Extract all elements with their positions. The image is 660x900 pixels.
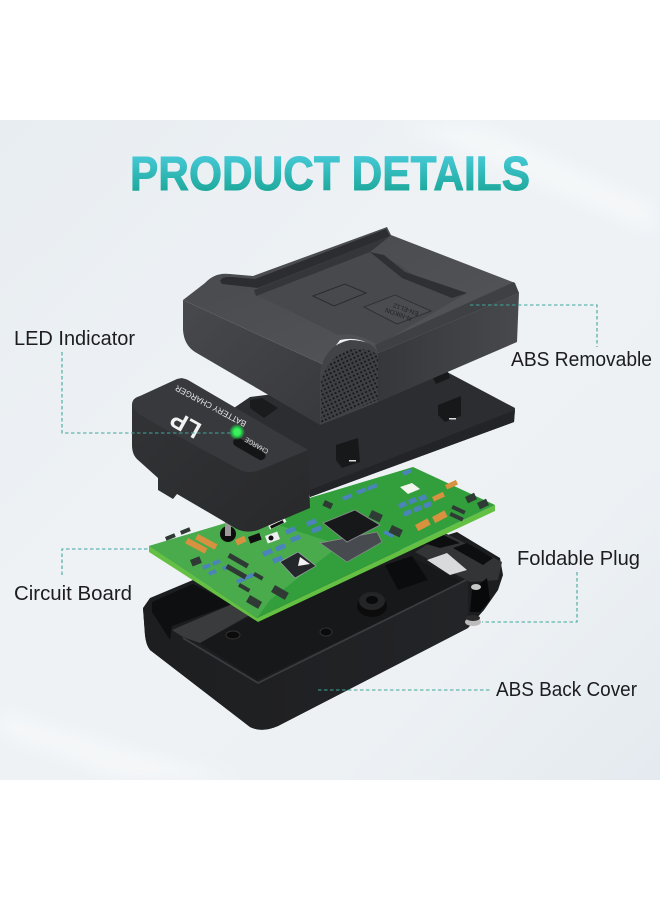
plate lower edge	[310, 410, 515, 497]
circuit board	[149, 467, 495, 622]
board lit area	[149, 516, 340, 618]
cover boss	[357, 592, 387, 617]
callout: ABS Removable	[470, 305, 652, 371]
led indicator	[229, 424, 245, 440]
brand text: BATTERY CHARGER	[173, 383, 248, 429]
adapter contact window	[313, 284, 366, 306]
cover interior floor	[200, 558, 463, 680]
cover outer body	[143, 532, 503, 730]
adapter right rail	[375, 282, 519, 353]
adapter recess wall	[254, 236, 390, 296]
leader line	[318, 689, 490, 691]
plate body	[228, 372, 515, 497]
cover grey step	[172, 592, 290, 643]
small ic	[280, 552, 316, 578]
cover screw hole	[226, 631, 240, 639]
leader line	[62, 352, 234, 433]
cover small hole	[320, 628, 332, 636]
board edge	[149, 505, 495, 622]
plug compartment	[415, 533, 502, 626]
charge text: CHARGE	[244, 435, 270, 454]
title: PRODUCT DETAILS	[130, 148, 530, 201]
logo: LP	[166, 405, 206, 443]
adapter left rail groove	[220, 229, 390, 288]
charger clip	[250, 398, 278, 418]
adapter left face	[183, 300, 322, 425]
white pad	[400, 483, 420, 494]
cover inner plug shadow	[385, 556, 428, 590]
board components	[165, 469, 489, 609]
adapter plate	[183, 227, 519, 425]
leader line	[62, 549, 150, 575]
back cover	[143, 532, 503, 730]
dark parts	[165, 493, 489, 609]
charge label pill	[232, 436, 267, 462]
adapter model label: EN-EL12	[392, 301, 420, 317]
middle plate	[228, 372, 515, 497]
label: Circuit Board	[14, 583, 132, 605]
blue resistors	[202, 469, 432, 584]
adapter model label	[364, 295, 431, 324]
label: Foldable Plug	[517, 548, 640, 570]
plate clips	[336, 372, 461, 468]
callout: Foldable Plug	[482, 548, 640, 622]
callout: LED Indicator	[14, 328, 234, 433]
charger body	[132, 378, 310, 532]
label: ABS Back Cover	[496, 679, 637, 701]
adapter top face	[183, 227, 519, 364]
chip	[320, 510, 382, 562]
background panel	[0, 120, 660, 780]
adapter right face	[378, 293, 519, 402]
black and white parts	[248, 517, 286, 544]
orange parts	[185, 480, 458, 554]
cover rim highlight	[183, 580, 466, 683]
cover left cavity	[152, 584, 232, 640]
adapter mesh grille	[321, 349, 378, 423]
callout: Circuit Board	[14, 549, 150, 605]
capacitor	[220, 522, 236, 542]
cover front wall	[143, 578, 468, 730]
charger main block	[132, 378, 310, 532]
leader line	[470, 305, 597, 347]
adapter battery recess	[253, 252, 467, 345]
label: LED Indicator	[14, 328, 135, 350]
adapter front bump	[320, 340, 378, 425]
board surface	[149, 467, 495, 618]
adapter model label: N-NIKON	[384, 306, 413, 322]
background light streaks	[0, 125, 655, 780]
charger top face	[132, 378, 308, 472]
adapter notch wall	[370, 252, 467, 298]
leader line	[482, 572, 577, 622]
label: ABS Removable	[511, 349, 652, 371]
